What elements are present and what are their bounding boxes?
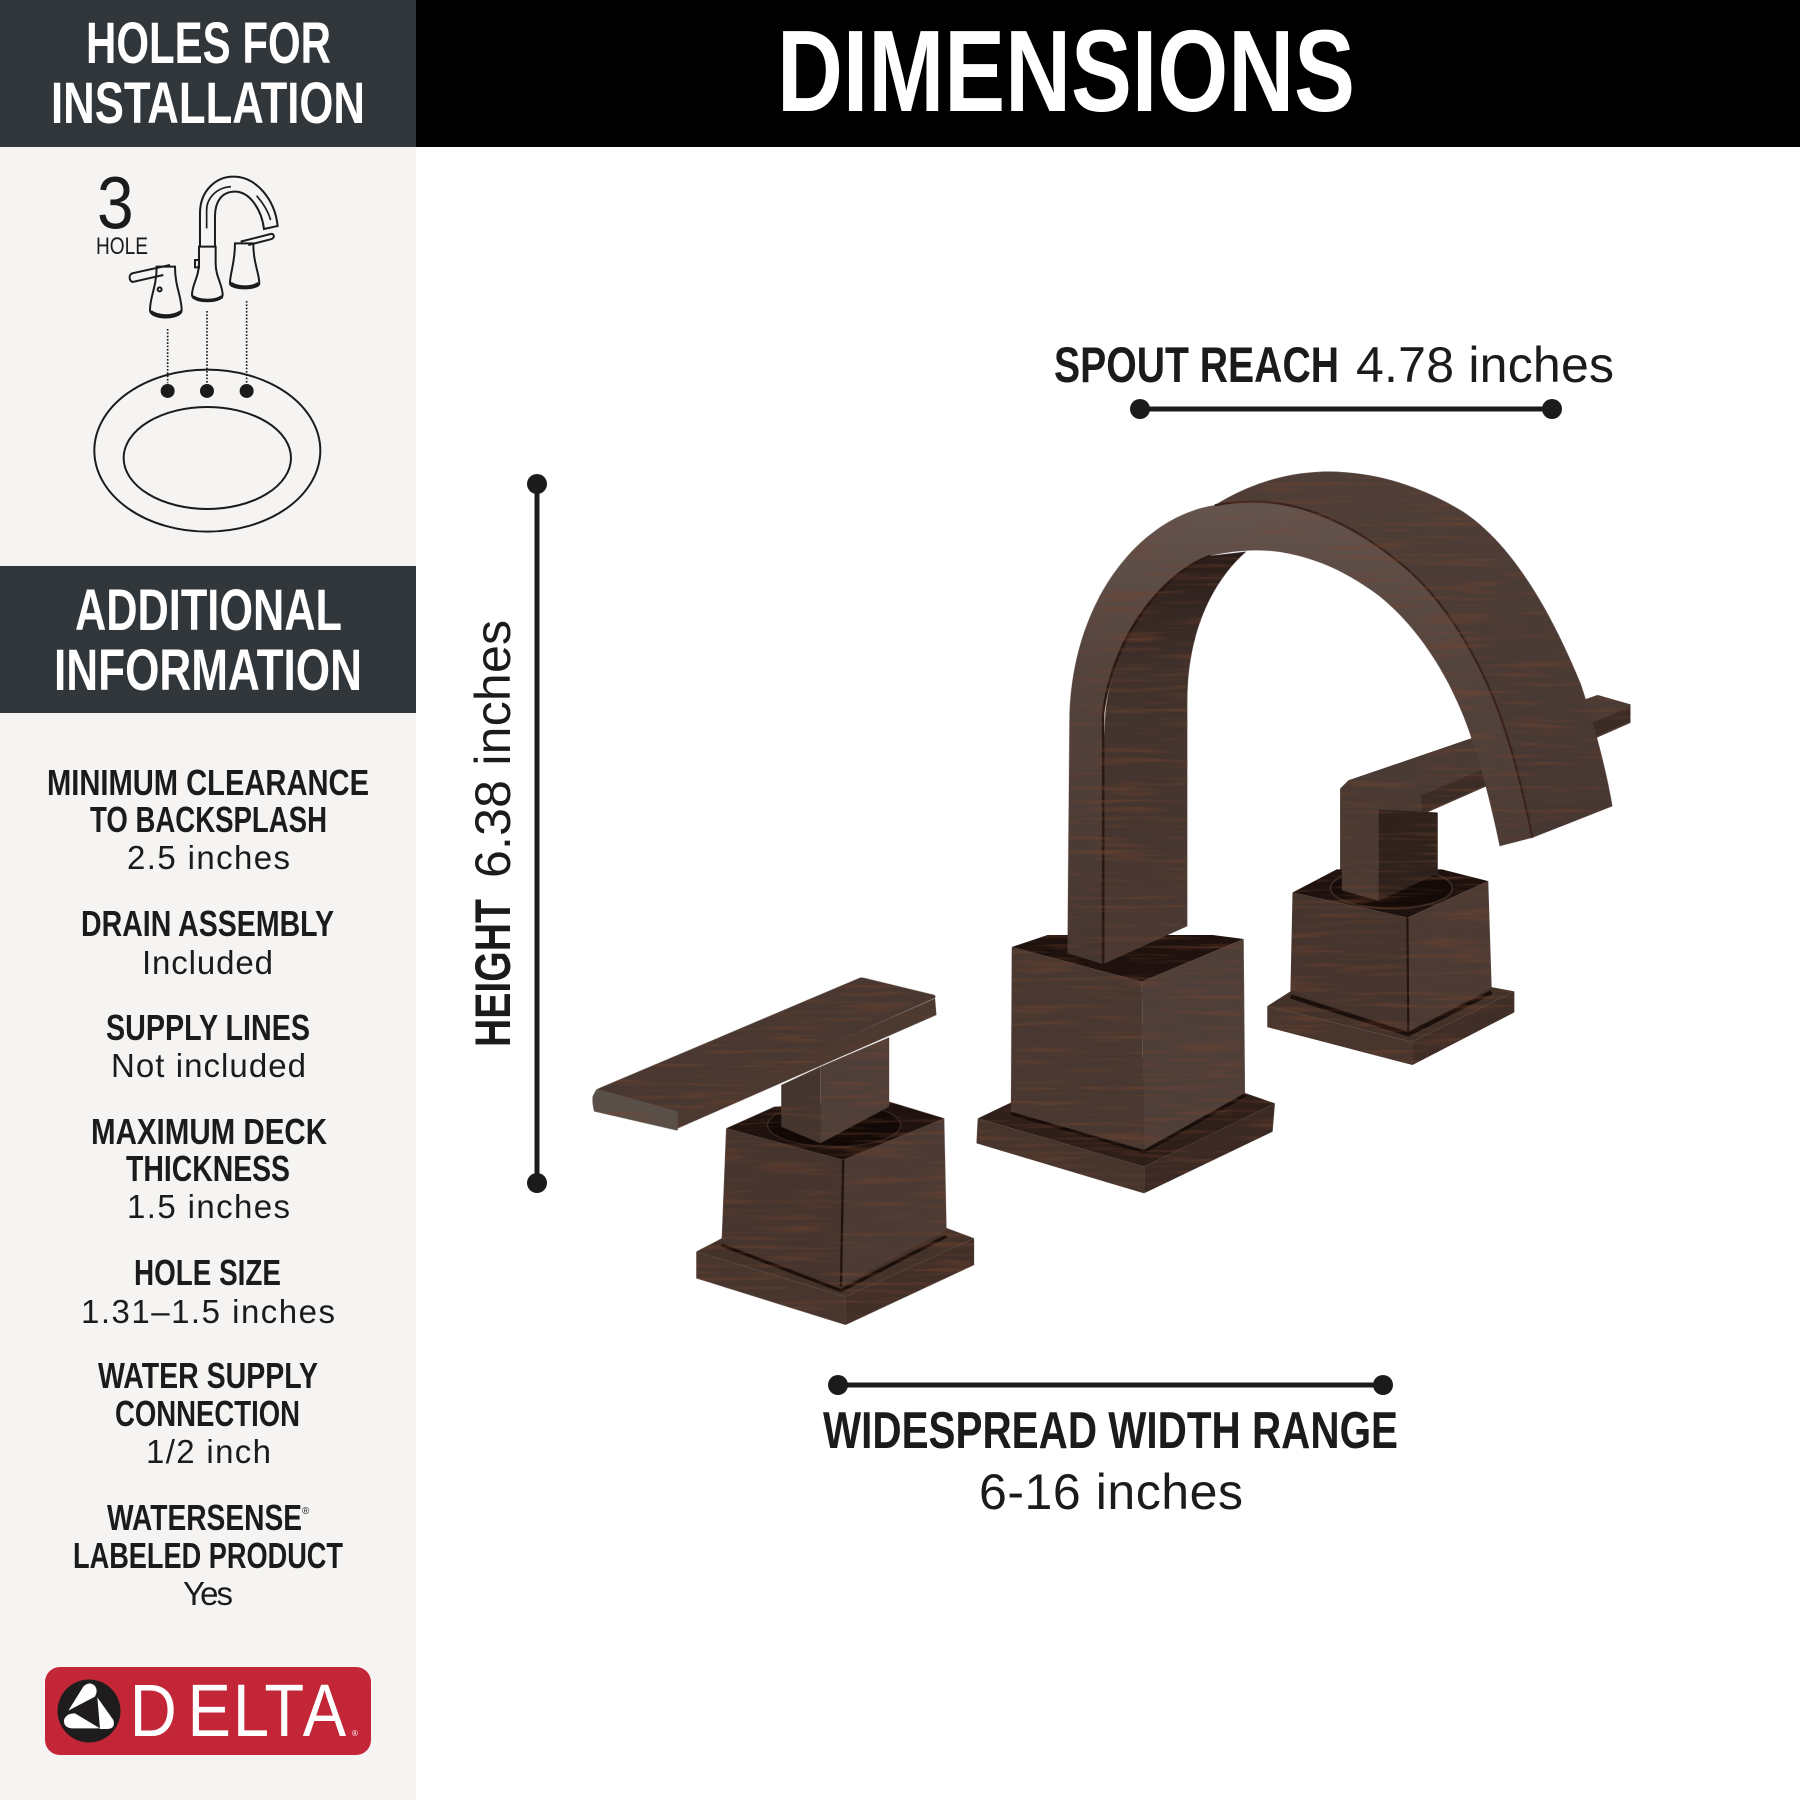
spec: maximum deck thickness xyxy=(91,1111,327,1225)
spout xyxy=(1067,472,1612,964)
spec: minimum clearance: TO BACKSPLASH xyxy=(90,799,327,840)
spec: maximum deck thickness: THICKNESS xyxy=(126,1148,290,1189)
dimension: height: 6.38 inches xyxy=(465,620,521,878)
heading: holes for installation: HOLES FOR xyxy=(86,11,331,76)
icon: three hole faucet and sink: HOLE xyxy=(96,233,148,260)
dimension: widespread width range xyxy=(823,1375,1398,1520)
dimension: spout reach: SPOUT REACH xyxy=(1054,337,1339,393)
spec: watersense labeled product: WATERSENSE xyxy=(107,1497,302,1538)
heading: additional information xyxy=(0,566,416,713)
spec: minimum clearance: 2.5 inches xyxy=(127,839,290,876)
dimension: spout reach xyxy=(1054,337,1614,419)
spec: hole size: 1.31–1.5 inches xyxy=(81,1293,335,1330)
right handle xyxy=(1267,697,1630,1065)
spec: watersense labeled product: Yes xyxy=(183,1575,233,1612)
spec: water supply connection: CONNECTION xyxy=(115,1393,300,1434)
dimension: height: HEIGHT xyxy=(465,899,521,1047)
heading: additional information: ADDITIONAL xyxy=(75,578,342,643)
spec: water supply connection: WATER SUPPLY xyxy=(98,1355,318,1396)
spec: watersense labeled product xyxy=(73,1497,343,1612)
sidebar background xyxy=(0,0,416,1800)
spec: hole size xyxy=(81,1252,335,1330)
icon: three hole faucet and sink xyxy=(94,161,320,532)
logo: delta: ® xyxy=(352,1729,358,1738)
spec: hole size: HOLE SIZE xyxy=(134,1252,281,1293)
spec: drain assembly: Included xyxy=(142,944,273,981)
spec: maximum deck thickness: MAXIMUM DECK xyxy=(91,1111,327,1152)
left handle xyxy=(593,979,974,1325)
spec: drain assembly xyxy=(81,903,334,981)
dimension: widespread width range: WIDESPREAD WIDTH RANGE xyxy=(823,1402,1398,1460)
heading: holes for installation xyxy=(0,0,416,147)
icon: three hole faucet and sink: 3 xyxy=(97,161,134,244)
logo: delta: DELTA xyxy=(130,1669,347,1752)
center base xyxy=(976,935,1275,1193)
spec: drain assembly: DRAIN ASSEMBLY xyxy=(81,903,334,944)
spec: supply lines: SUPPLY LINES xyxy=(106,1007,310,1048)
product image: bronze faucet xyxy=(593,472,1630,1325)
title bar: DIMENSIONS xyxy=(777,6,1355,136)
dimension: height xyxy=(465,474,547,1193)
spec: maximum deck thickness: 1.5 inches xyxy=(127,1188,290,1225)
spec: watersense labeled product: LABELED PRODUCT xyxy=(73,1535,343,1576)
spec: water supply connection: 1/2 inch xyxy=(146,1433,271,1470)
title bar xyxy=(416,0,1800,147)
heading: additional information: INFORMATION xyxy=(54,638,362,703)
logo: delta xyxy=(45,1667,371,1755)
dimension: widespread width range: 6-16 inches xyxy=(979,1464,1243,1520)
spec: watersense labeled product: ® xyxy=(302,1506,310,1517)
spec: water supply connection xyxy=(98,1355,318,1470)
spec: minimum clearance xyxy=(47,762,369,876)
spec: minimum clearance: MINIMUM CLEARANCE xyxy=(47,762,369,803)
dimension: spout reach: 4.78 inches xyxy=(1356,337,1614,393)
spec: supply lines: Not included xyxy=(111,1047,306,1084)
spec: supply lines xyxy=(106,1007,310,1084)
heading: holes for installation: INSTALLATION xyxy=(51,71,365,136)
